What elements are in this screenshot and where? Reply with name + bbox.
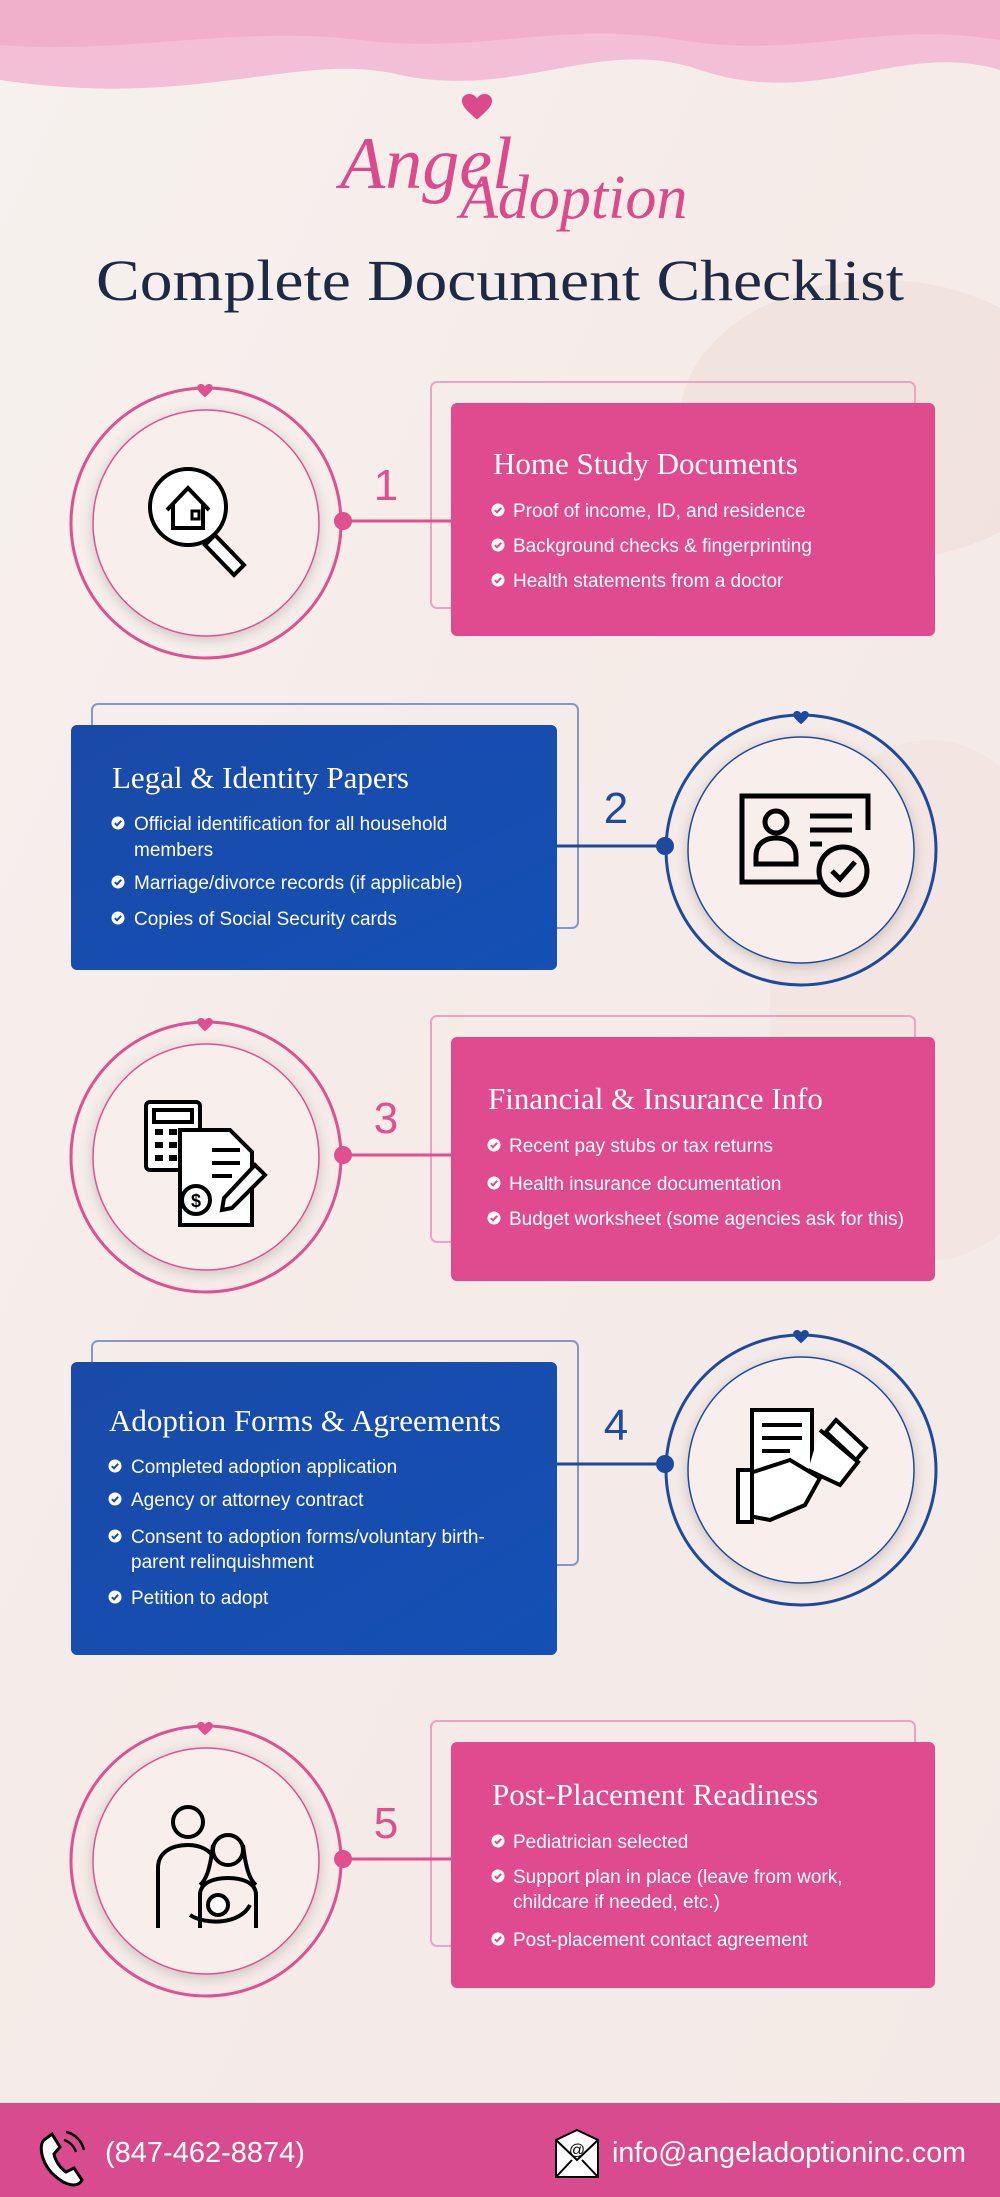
- panel: post-placement: Post-Placement Readiness: [492, 1777, 818, 1812]
- icon: email: @: [569, 2142, 585, 2159]
- panel: home study: Home Study Documents: [493, 446, 798, 481]
- panel: home study: [451, 403, 935, 636]
- section 5: 5: [374, 1799, 398, 1848]
- panel: adoption forms: Consent to adoption forms/voluntary birth-: [131, 1527, 485, 1548]
- panel: legal: Copies of Social Security cards: [134, 909, 397, 930]
- panel: home study: Background checks & fingerprinting: [513, 536, 812, 557]
- section 4: 4: [604, 1401, 628, 1450]
- icon: family: [158, 1807, 256, 1928]
- footer: info@angeladoptioninc.com: [612, 2137, 966, 2169]
- ring 5: [71, 1722, 341, 1996]
- panel: financial: [451, 1037, 935, 1281]
- section 3: $: [191, 1191, 201, 1211]
- panel: home study: Proof of income, ID, and residence: [513, 501, 806, 522]
- ring 3: [71, 1018, 341, 1292]
- icon: phone: [41, 2132, 84, 2185]
- panel: legal: Legal & Identity Papers: [112, 760, 409, 795]
- icon: email: [556, 2130, 598, 2177]
- section 2: [92, 704, 936, 985]
- footer: [0, 2103, 1000, 2197]
- panel: adoption forms: Completed adoption application: [131, 1457, 397, 1478]
- section 1: [71, 382, 915, 658]
- section 3: [71, 1016, 915, 1292]
- panel: financial: Financial & Insurance Info: [488, 1081, 823, 1116]
- panel: adoption forms: Agency or attorney contract: [131, 1490, 364, 1511]
- panel: post-placement: Post-placement contact agreement: [513, 1930, 808, 1951]
- section 4: [92, 1330, 936, 1605]
- panel: legal: Official identification for all household: [134, 814, 447, 835]
- section 1: 1: [374, 461, 398, 510]
- logo: Adoption: [456, 164, 687, 232]
- icon: handshake agreement: [738, 1410, 866, 1522]
- panel: financial: Budget worksheet (some agencies ask for this): [509, 1209, 904, 1230]
- panel: post-placement: Support plan in place (leave from work,: [513, 1867, 842, 1888]
- section 2: 2: [604, 784, 628, 833]
- panel: home study: Health statements from a doctor: [513, 571, 784, 592]
- ring 1: [71, 384, 341, 658]
- panel: financial: Recent pay stubs or tax returns: [509, 1136, 773, 1157]
- panel: post-placement: [451, 1742, 935, 1988]
- icon: calculator & invoice: [146, 1102, 265, 1225]
- section 3: 3: [374, 1094, 398, 1143]
- panel: legal: members: [134, 840, 213, 861]
- icon: house magnifier: [150, 469, 244, 575]
- panel: adoption forms: Petition to adopt: [131, 1588, 269, 1609]
- panel: post-placement: childcare if needed, etc.): [513, 1892, 720, 1913]
- panel: adoption forms: [71, 1362, 557, 1655]
- logo: Angel: [335, 123, 513, 205]
- top wave banner: [0, 0, 1000, 89]
- panel: adoption forms: parent relinquishment: [131, 1552, 314, 1573]
- section 5: [71, 1721, 915, 1996]
- panel: post-placement: Pediatrician selected: [513, 1832, 688, 1853]
- title: Complete Document Checklist: [96, 248, 904, 313]
- ring 4: [666, 1330, 936, 1605]
- panel: legal: [71, 725, 557, 970]
- icon: ID card: [742, 796, 868, 895]
- ring 2: [666, 711, 936, 985]
- panel: legal: Marriage/divorce records (if applicable): [134, 873, 462, 894]
- footer: (847-462-8874): [105, 2137, 305, 2169]
- panel: adoption forms: Adoption Forms & Agreements: [109, 1403, 501, 1438]
- logo: [335, 94, 687, 232]
- panel: financial: Health insurance documentation: [509, 1174, 782, 1195]
